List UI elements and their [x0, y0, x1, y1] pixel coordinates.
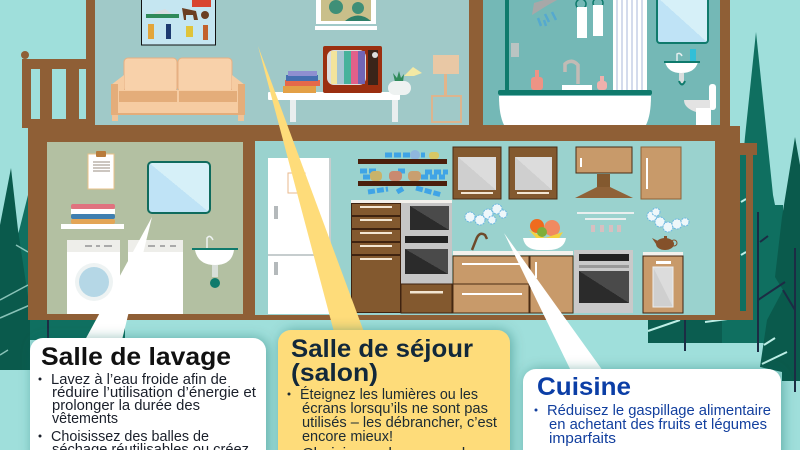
towels	[576, 0, 603, 38]
soap bottles	[531, 70, 607, 90]
laundry: washing machine	[67, 240, 120, 314]
bullet list: laundry tips: réduire l’utilisation d’énergie et	[52, 385, 256, 401]
laundry: dryer	[128, 240, 183, 314]
kitchen: fruit bowl	[523, 219, 566, 250]
bullet list: laundry tips: vêtements	[52, 411, 118, 427]
faucet	[565, 61, 578, 84]
panel: laundry room	[30, 338, 266, 450]
kitchen: built-in microwave	[401, 203, 452, 234]
plant in vase	[388, 67, 422, 95]
bullet list: living room tips: Éteignez les lumières ou les	[300, 386, 478, 403]
bullet list: laundry tips: Lavez à l’eau froide afin de	[51, 372, 227, 388]
callout pointer: laundry	[85, 217, 152, 340]
kitchen: wall cabinets with glass	[453, 147, 557, 199]
heading: living room	[291, 335, 473, 387]
toilet	[684, 84, 716, 125]
tub	[499, 96, 651, 125]
poster	[142, 0, 216, 45]
room: kitchen	[255, 141, 715, 315]
bullet list: kitchen tips: en achetant des fruits et légumes	[549, 417, 767, 433]
bullet list: living room tips: utilisés – les débrancher, c’est	[302, 415, 497, 431]
kitchen: built-in oven	[401, 234, 452, 284]
curtain	[613, 0, 647, 92]
panel: kitchen tips	[523, 369, 781, 450]
kitchen: stove	[574, 250, 633, 313]
laundry: sink	[192, 236, 238, 288]
kitchen: fridge	[268, 158, 331, 314]
bullet list: living room tips	[288, 386, 497, 450]
shower and bathtub	[498, 0, 652, 125]
room: laundry	[47, 142, 243, 314]
trees: left	[0, 168, 125, 370]
callout pointer: living room	[258, 46, 364, 332]
books	[283, 71, 320, 93]
kitchen: wall cabinet	[641, 147, 681, 199]
kitchen: decorative tile splash right	[647, 208, 689, 232]
heading: living room: Salle de séjour	[291, 335, 473, 363]
bullet list: living room tips: écrans lorsqu’ils ne sont pas	[302, 401, 488, 417]
bullet list: laundry tips: Choisissez des balles de	[51, 429, 209, 445]
panel: living room tips	[278, 330, 510, 450]
bullet list: living room tips: encore mieux!	[302, 429, 393, 445]
bullet list: laundry tips: prolonger la durée des	[52, 398, 200, 414]
kitchen: base counter and cabinets	[453, 251, 573, 313]
heading: laundry room: Salle de lavage	[41, 343, 231, 371]
kitchen: utensil rack with glasses	[577, 212, 634, 232]
lamp on side table	[432, 55, 461, 122]
heading: kitchen: Cuisine	[537, 373, 631, 401]
kitchen: faucet	[472, 234, 487, 250]
bathroom sink	[664, 49, 700, 84]
kitchen: corner cabinet	[643, 252, 683, 313]
heading: living room: (salon)	[291, 359, 378, 387]
house structure	[21, 0, 757, 320]
room: living room	[95, 0, 469, 125]
bullet list: laundry tips	[38, 372, 256, 450]
kitchen: range hood	[575, 147, 633, 198]
laundry: stacked towels and shelf	[61, 204, 124, 229]
bathroom mirror	[657, 0, 708, 43]
kitchen: shelves with jars and leaf pattern	[358, 150, 448, 195]
sofa	[111, 58, 245, 121]
room: bathroom	[483, 0, 720, 125]
bullet list: kitchen tips: Réduisez le gaspillage alimentaire	[547, 403, 771, 419]
laundry: clipboard	[88, 151, 114, 189]
kitchen: decorative tile splash left	[465, 204, 507, 225]
laundry: mirror	[148, 162, 210, 213]
bullet list: kitchen tips	[534, 403, 771, 447]
wall shelf with books, TV and plant	[268, 46, 422, 122]
trees: right	[648, 32, 800, 392]
kitchen: tall drawer unit	[351, 200, 452, 313]
kitchen: drawer under oven	[401, 284, 452, 313]
picture frame on the wall	[315, 0, 377, 30]
bullet list: kitchen tips: imparfaits	[549, 431, 616, 447]
retro TV	[323, 46, 382, 93]
callout pointer: kitchen	[504, 233, 603, 371]
kitchen: teapot	[652, 236, 677, 250]
